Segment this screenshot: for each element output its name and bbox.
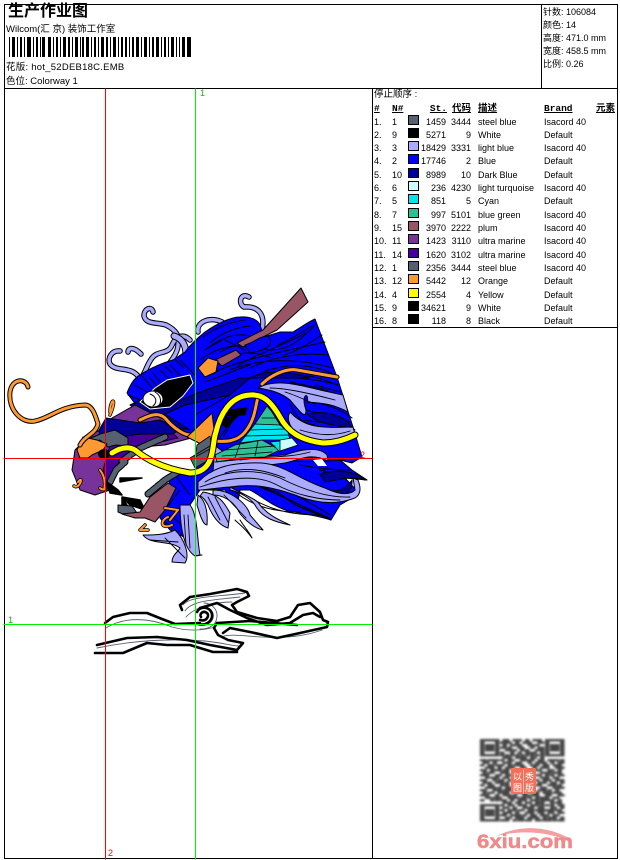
row 3: 3. <box>374 143 382 153</box>
row 14 <box>374 288 573 300</box>
green vertical guide <box>194 89 196 859</box>
row 3 <box>374 141 586 153</box>
row 9: 2222 <box>451 223 471 233</box>
strand five <box>180 505 200 556</box>
row 2: 5271 <box>426 130 446 140</box>
column: element: 元素 <box>596 103 615 114</box>
row 16: 118 <box>432 316 446 326</box>
row 4: Default <box>544 156 573 166</box>
row 8: 5101 <box>451 210 471 220</box>
row 5: 10 <box>392 170 402 180</box>
row 15 <box>374 301 573 313</box>
deep purple jaw <box>103 430 178 490</box>
column: code: 代码 <box>452 103 471 114</box>
row 14: 2554 <box>426 290 446 300</box>
row 5: 10 <box>461 170 471 180</box>
row 3: 18429 <box>421 143 446 153</box>
black nostril <box>98 449 110 459</box>
row 1: 3444 <box>451 117 471 127</box>
row 8 <box>374 208 586 220</box>
scale: 比例: 0.26 <box>543 59 584 69</box>
iris rings <box>150 392 161 407</box>
row 14: 14. <box>374 290 387 300</box>
guide label left: 1 <box>8 615 13 625</box>
steel jaw <box>118 505 137 515</box>
row 7: 7. <box>374 196 382 206</box>
red stamp: 秀 <box>525 770 534 783</box>
cloud spiral <box>197 608 212 625</box>
colours: 颜色: 14 <box>543 20 576 30</box>
row 4: Blue <box>478 156 496 166</box>
row 14: 4 <box>392 290 397 300</box>
strand two <box>213 490 263 530</box>
orange cheek <box>187 413 215 445</box>
6xiu.com logo <box>477 828 573 853</box>
row 16: Default <box>544 316 573 326</box>
row 5: Dark Blue <box>478 170 518 180</box>
row 13: Default <box>544 276 573 286</box>
row 8: blue green <box>478 210 521 220</box>
row 2: 9 <box>466 130 471 140</box>
row 16: 8 <box>392 316 397 326</box>
QR modules <box>481 740 564 820</box>
row 3: Isacord 40 <box>544 143 586 153</box>
row 12: 2356 <box>426 263 446 273</box>
blue green scales <box>215 406 280 462</box>
row 5 <box>374 168 573 180</box>
light blue band below upper mane <box>288 412 355 442</box>
orange swirl <box>198 358 218 377</box>
steel and plum patch <box>190 436 212 468</box>
row 13 <box>374 274 573 286</box>
row 9: 9. <box>374 223 382 233</box>
row 7: 5 <box>392 196 397 206</box>
row 13: Orange <box>478 276 508 286</box>
light blue hanging strands <box>143 487 290 563</box>
eyeball <box>143 391 163 407</box>
row 11: 14 <box>392 250 402 260</box>
cloud thin grey contours <box>97 593 322 648</box>
row 12 <box>374 261 586 273</box>
purple muzzle <box>72 405 195 495</box>
colorway: 色位: Colorway 1 <box>6 76 78 87</box>
eye socket <box>140 375 193 409</box>
row 7: 5 <box>466 196 471 206</box>
row 13: 12 <box>461 276 471 286</box>
strand one <box>230 487 290 525</box>
mane stitch lines <box>128 320 365 535</box>
row 14: Default <box>544 290 573 300</box>
light blue upper mane <box>258 383 348 415</box>
row 15: 9 <box>392 303 397 313</box>
barcode <box>9 37 191 57</box>
dark blue feathers <box>130 372 367 520</box>
plum tongue <box>122 483 176 522</box>
row 16 <box>374 314 573 326</box>
red stamp: 以 <box>513 770 522 783</box>
file name: 花版: hot_52DEB18C.EMB <box>6 62 125 73</box>
orange snout <box>77 437 107 458</box>
red stamp <box>511 768 536 794</box>
row 12: steel blue <box>478 263 517 273</box>
cloud thick outlines <box>95 589 328 653</box>
red stamp: 图 <box>513 781 522 794</box>
thin hanging thread <box>195 520 252 556</box>
steel teeth <box>110 437 178 494</box>
colour table header <box>374 102 615 114</box>
strand four <box>197 495 207 525</box>
row 6: light turquoise <box>478 183 534 193</box>
row 15: 15. <box>374 303 387 313</box>
QR code watermark <box>481 740 564 820</box>
teal scales <box>215 406 298 462</box>
scale stitches <box>222 418 288 458</box>
row 9: 15 <box>392 223 402 233</box>
blue strand over horn <box>245 336 271 353</box>
column: stitches: St. <box>430 103 447 114</box>
row 7: 851 <box>431 196 446 206</box>
row 11: ultra marine <box>478 250 526 260</box>
dragon head embroidery <box>10 288 367 563</box>
row 6: Isacord 40 <box>544 183 586 193</box>
yellow ribbon <box>112 395 355 473</box>
row 10: 11 <box>392 236 401 246</box>
row 16: Black <box>478 316 500 326</box>
green horizontal guide <box>4 624 372 626</box>
row 10 <box>374 234 586 246</box>
height: 高度: 471.0 mm <box>543 33 606 43</box>
row 7: Default <box>544 196 573 206</box>
row 12: 3444 <box>451 263 471 273</box>
row 6: 6 <box>392 183 397 193</box>
steel nose <box>82 430 128 447</box>
row 16: 16. <box>374 316 387 326</box>
row 4: 4. <box>374 156 382 166</box>
red stamp: 版 <box>525 781 534 794</box>
row 1: 1 <box>392 117 397 127</box>
row 7: Cyan <box>478 196 499 206</box>
row 2: Default <box>544 130 573 140</box>
row 15: 9 <box>466 303 471 313</box>
white mouth gap <box>117 432 200 494</box>
column: needle: N# <box>392 103 403 114</box>
row 8: 997 <box>431 210 446 220</box>
guide label right: 2 <box>360 450 365 460</box>
row 8: 7 <box>392 210 397 220</box>
row 13: 13. <box>374 276 387 286</box>
row 8: Isacord 40 <box>544 210 586 220</box>
row 10: 10. <box>374 236 387 246</box>
lower cloud embroidery <box>95 589 328 653</box>
row 6 <box>374 181 586 193</box>
light blue mid mane <box>213 445 328 472</box>
row 4 <box>374 154 573 166</box>
row 9: plum <box>478 223 498 233</box>
column: sequence: # <box>374 103 380 114</box>
row 15: Default <box>544 303 573 313</box>
row 13: 12 <box>392 276 402 286</box>
row 1: 1459 <box>426 117 446 127</box>
row 2: 9 <box>392 130 397 140</box>
guide label top: 1 <box>200 88 205 98</box>
big light blue swoosh <box>198 463 360 502</box>
light turquoise scales <box>280 438 298 451</box>
row 2: White <box>478 130 501 140</box>
row 14: Yellow <box>478 290 504 300</box>
row 4: 17746 <box>421 156 446 166</box>
row 16: 8 <box>466 316 471 326</box>
row 12: Isacord 40 <box>544 263 586 273</box>
strand three <box>200 492 230 528</box>
company name: Wilcom(汇 京) 装饰工作室 <box>6 24 115 35</box>
blue mane body <box>120 317 367 538</box>
row 12: 12. <box>374 263 387 273</box>
column: brand: Brand <box>544 103 573 114</box>
row 8: 8. <box>374 210 382 220</box>
row 4: 2 <box>392 156 397 166</box>
row 10: Isacord 40 <box>544 236 586 246</box>
white mane gap <box>313 459 327 466</box>
swoosh stitch lines <box>150 388 350 558</box>
dark blue brow <box>99 418 180 440</box>
logo text: 6xiu.com <box>477 832 573 853</box>
row 15: 34621 <box>421 303 446 313</box>
width: 宽度: 458.5 mm <box>543 46 606 56</box>
dragon eye <box>140 375 193 409</box>
row 15: White <box>478 303 501 313</box>
strand six <box>143 530 187 563</box>
orange whiskers and strands <box>10 370 337 530</box>
plum horn <box>215 288 308 366</box>
row 6: 4230 <box>451 183 471 193</box>
row 11 <box>374 248 586 260</box>
row 1: Isacord 40 <box>544 117 586 127</box>
row 9: Isacord 40 <box>544 223 586 233</box>
row 10: ultra marine <box>478 236 526 246</box>
row 5: 8989 <box>426 170 446 180</box>
row 14: 4 <box>466 290 471 300</box>
dark pocket inside loop <box>222 408 247 428</box>
red horizontal guide <box>4 458 372 460</box>
row 11: 1620 <box>426 250 446 260</box>
row 5: 5. <box>374 170 382 180</box>
row 12: 1 <box>392 263 397 273</box>
guide label bottom: 2 <box>108 848 113 858</box>
row 10: 1423 <box>426 236 446 246</box>
row 4: 2 <box>466 156 471 166</box>
light blue curls above head <box>109 296 263 378</box>
row 7 <box>374 194 573 206</box>
row 11: 11. <box>374 250 386 260</box>
row 1 <box>374 115 586 127</box>
row 3: light blue <box>478 143 514 153</box>
row 9: 3970 <box>426 223 446 233</box>
row 1: 1. <box>374 117 382 127</box>
row 2: 2. <box>374 130 382 140</box>
column: description: 描述 <box>478 103 497 114</box>
row 6: 236 <box>431 183 446 193</box>
logo arc <box>497 828 572 842</box>
row 10: 3110 <box>452 236 471 246</box>
row 9 <box>374 221 586 233</box>
black fangs <box>107 478 145 510</box>
cyan scales <box>240 424 290 452</box>
title: 生产作业图 <box>8 3 88 20</box>
stop sequence heading: 停止顺序 : <box>374 89 417 100</box>
red vertical guide <box>104 89 106 859</box>
row 11: Isacord 40 <box>544 250 586 260</box>
row 3: 3331 <box>451 143 471 153</box>
design statistics <box>543 7 606 69</box>
row 13: 5442 <box>426 276 446 286</box>
stitches: 针数: 106084 <box>543 7 596 17</box>
row 5: Default <box>544 170 573 180</box>
row 2 <box>374 128 573 140</box>
row 6: 6. <box>374 183 382 193</box>
row 1: steel blue <box>478 117 517 127</box>
row 11: 3102 <box>451 250 471 260</box>
row 3: 3 <box>392 143 397 153</box>
